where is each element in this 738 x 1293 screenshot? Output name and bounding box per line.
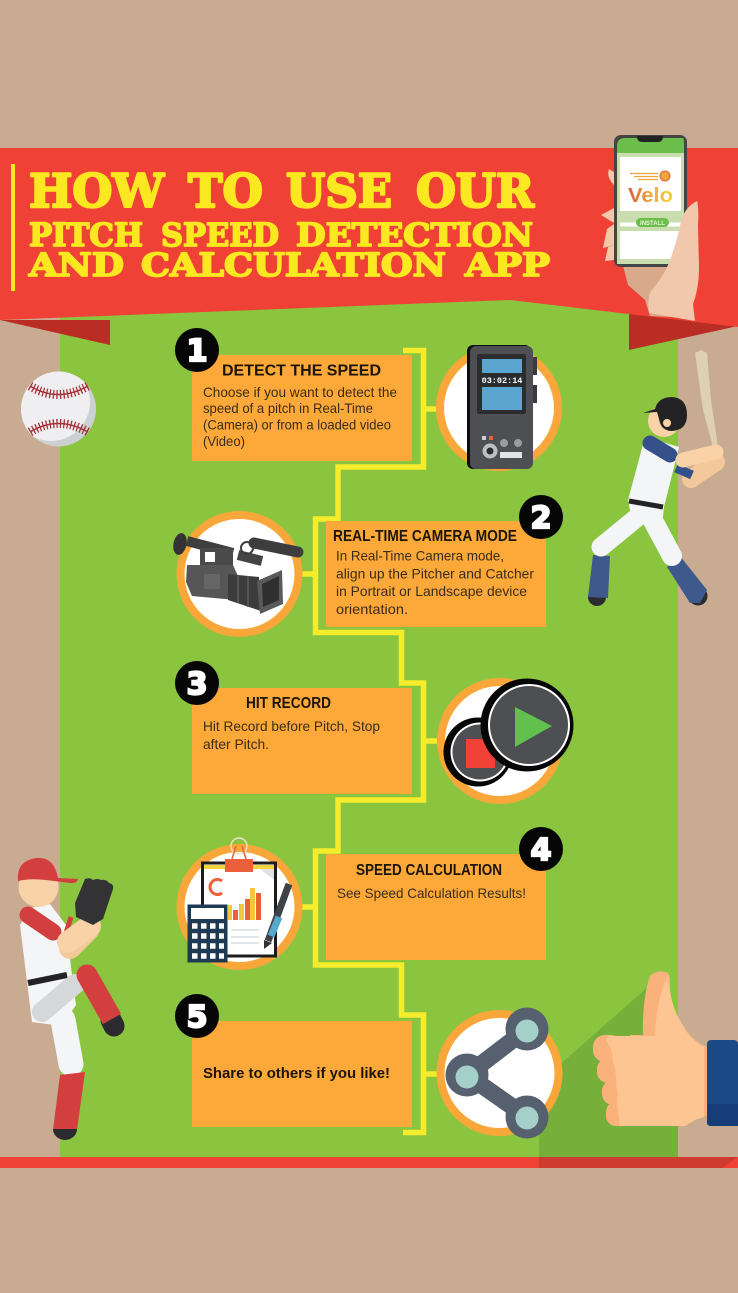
title: PITCH <box>29 216 143 254</box>
title: CALCULATION <box>141 246 446 284</box>
number badge 1 <box>175 328 219 372</box>
icon: share <box>436 1008 562 1138</box>
number badge 2: 2 <box>531 501 551 536</box>
step 5 text: Share to others if you like! <box>203 1065 390 1082</box>
step 2 body: In Real-Time Camera mode, <box>336 548 504 564</box>
title: DETECTION <box>296 216 533 254</box>
icon: hand holding phone: INSTALL <box>640 221 665 227</box>
step 3 body: Hit Record before Pitch, Stop <box>203 718 380 734</box>
icon: video camera <box>171 511 302 637</box>
icon: clipboard and calculator <box>176 838 302 970</box>
title: HOW <box>29 164 165 218</box>
title: AND <box>28 246 124 284</box>
icon: hand holding phone <box>601 135 699 321</box>
step 1 body: (Camera) or from a loaded video <box>203 416 391 432</box>
number badge 5 <box>175 994 219 1038</box>
title: APP <box>464 246 550 284</box>
illustration: baseball <box>21 372 96 446</box>
step 4 body: See Speed Calculation Results! <box>337 885 526 901</box>
icon: voice recorder <box>436 345 562 471</box>
illustration: thumbs up hand <box>593 972 738 1126</box>
title accent bar <box>11 164 15 291</box>
number badge 4: 4 <box>531 833 551 868</box>
icon: record and play buttons <box>437 678 574 804</box>
number badge 3: 3 <box>187 667 207 702</box>
step 2 box <box>326 521 546 627</box>
number badge 2 <box>519 495 563 539</box>
number badge 1: 1 <box>187 334 207 369</box>
number badge 4 <box>519 827 563 871</box>
bottom red strip <box>0 1157 738 1168</box>
step 3 box <box>192 688 412 794</box>
step 1 body: (Video) <box>203 433 245 449</box>
hand shadow <box>539 985 738 1168</box>
step 2 body: orientation. <box>336 601 408 617</box>
number badge 5: 5 <box>187 1000 207 1035</box>
title: SPEED <box>161 216 279 254</box>
illustration: batter <box>588 350 718 606</box>
title <box>28 164 550 284</box>
step 4 heading: SPEED CALCULATION <box>356 862 502 879</box>
number badge 3 <box>175 661 219 705</box>
step 3 body: after Pitch. <box>203 736 269 752</box>
step 1 box <box>192 355 412 461</box>
step 2 heading: REAL-TIME CAMERA MODE <box>333 528 517 545</box>
step 2 body: align up the Pitcher and Catcher <box>336 566 534 582</box>
infographic <box>0 135 738 1168</box>
step 4 box <box>326 854 546 960</box>
step 2 body: in Portrait or Landscape device <box>336 583 527 599</box>
icon: hand holding phone: Velo <box>628 185 673 207</box>
connector line <box>302 350 437 1132</box>
red title banner <box>0 148 738 327</box>
green field <box>60 300 678 1158</box>
illustration: pitcher <box>18 858 114 1140</box>
step 1 body: Choose if you want to detect the <box>203 384 397 400</box>
ribbon folds <box>0 314 738 350</box>
step 1 heading: DETECT THE SPEED <box>222 362 381 380</box>
step 1 body: speed of a pitch in Real-Time <box>203 400 373 416</box>
title: OUR <box>416 164 535 218</box>
title: TO <box>188 164 263 218</box>
icon: voice recorder: 03:02:14 <box>482 376 522 386</box>
title: USE <box>286 164 392 218</box>
step 5 box <box>192 1021 412 1127</box>
step 3 heading: HIT RECORD <box>246 695 331 712</box>
